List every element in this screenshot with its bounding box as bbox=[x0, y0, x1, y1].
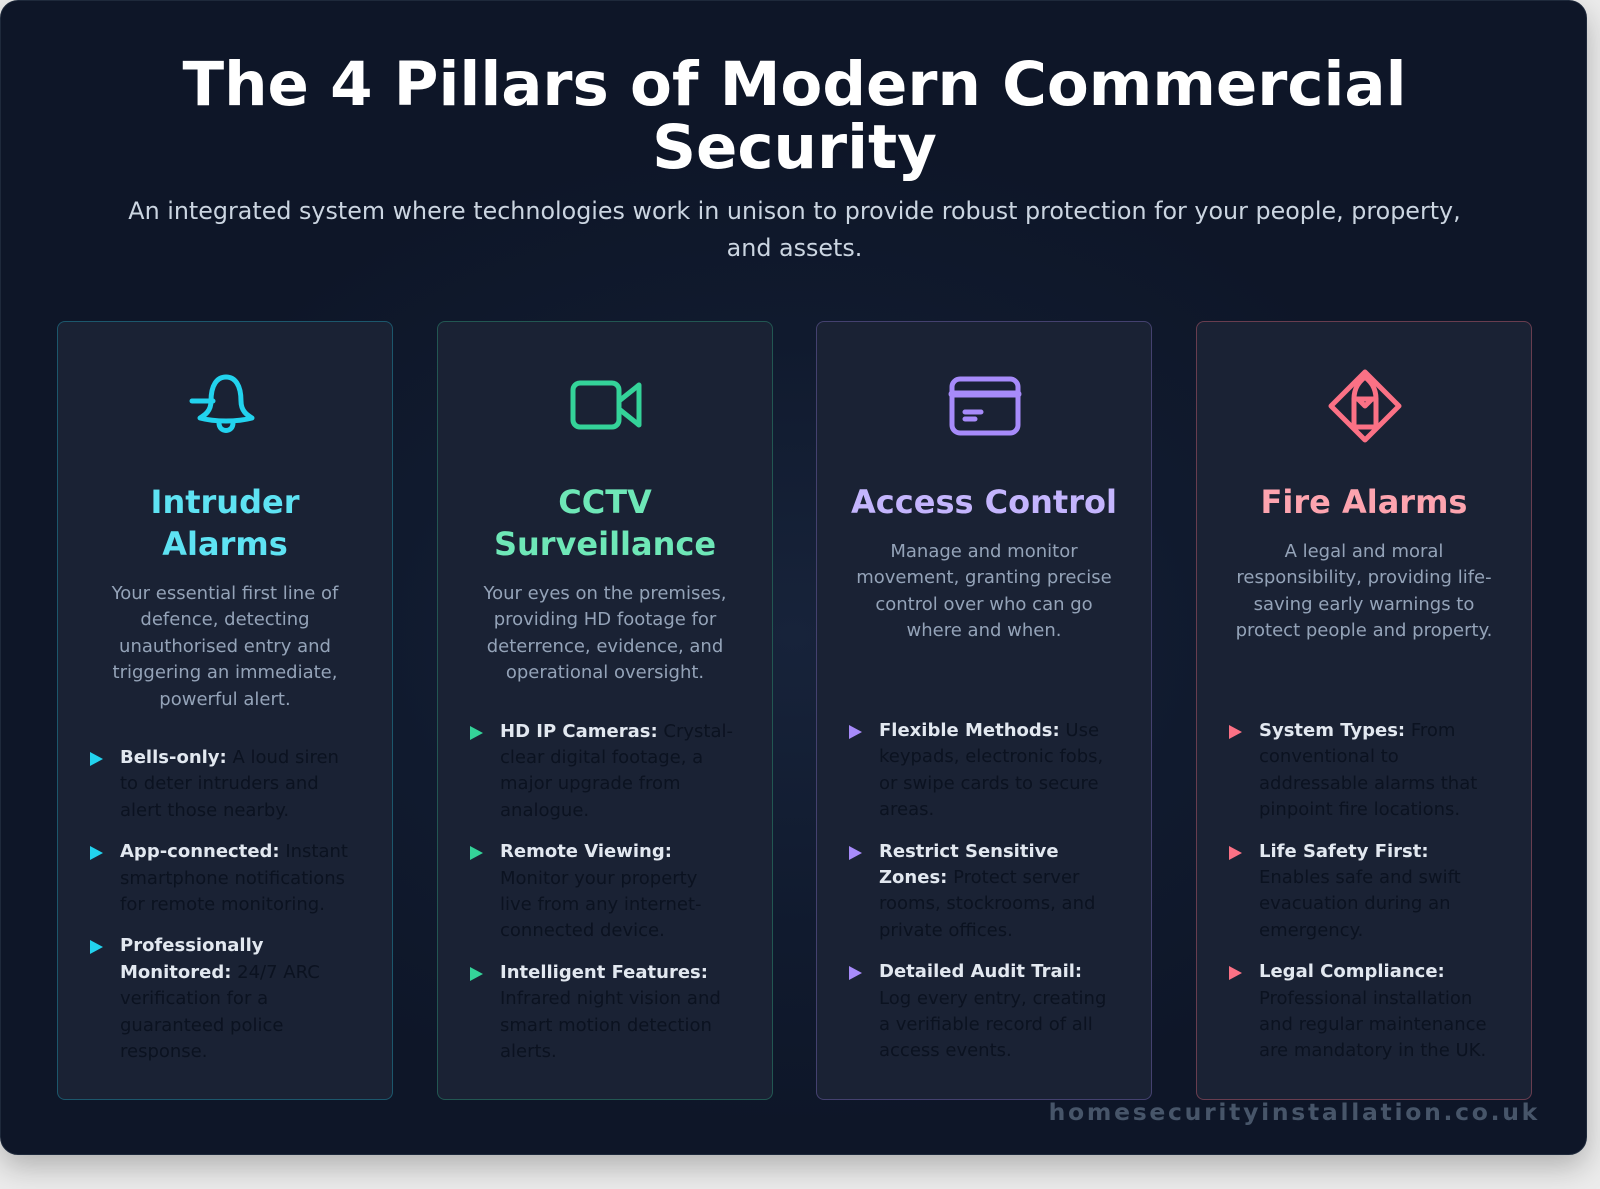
bullet list bbox=[1229, 720, 1487, 1061]
bullet list: Detailed Audit Trail: Log every entry, creating a verifiable record of all access events. bbox=[879, 961, 1106, 1061]
heading bbox=[151, 483, 300, 563]
title: Security bbox=[652, 112, 937, 183]
bullet list: Bells-only: A loud siren to deter intruders and alert those nearby. bbox=[120, 747, 339, 821]
title: The 4 Pillars of Modern Commercial bbox=[182, 49, 1407, 120]
bullet list: Life Safety First: Enables safe and swift evacuation during an emergency. bbox=[1259, 841, 1461, 941]
heading: Alarms bbox=[162, 525, 288, 563]
icon: video camera bbox=[570, 380, 642, 430]
bullet list: Flexible Methods: Use keypads, electronic fobs, or swipe cards to secure areas. bbox=[879, 720, 1103, 820]
panel: access control bbox=[816, 321, 1152, 1100]
bullet list: Restrict Sensitive Zones: Protect server rooms, stockrooms, and private offices. bbox=[879, 841, 1095, 941]
heading: CCTV bbox=[558, 483, 652, 521]
subtitle: An integrated system where technologies work in unison to provide robust protection for your people, property, bbox=[128, 197, 1461, 225]
panel: intruder alarms bbox=[57, 321, 393, 1100]
bullet list: Legal Compliance: Professional installation and regular maintenance are mandatory in the UK. bbox=[1259, 961, 1487, 1061]
bullet list bbox=[90, 747, 348, 1062]
subtitle bbox=[128, 197, 1461, 262]
description: Manage and monitor movement, granting precise control over who can go where and when. bbox=[856, 541, 1112, 641]
description: Your essential first line of defence, detecting unauthorised entry and triggering an immediate, powerful alert. bbox=[112, 583, 338, 710]
bullet list: live from any internet-connected device. bbox=[500, 894, 702, 941]
title bbox=[182, 49, 1407, 183]
icon: bell bbox=[190, 374, 254, 433]
footer url: homesecurityinstallation.co.uk bbox=[1049, 1098, 1540, 1126]
bullet list: App-connected: Instant smartphone notifications for remote monitoring. bbox=[120, 841, 348, 915]
heading: Intruder bbox=[151, 483, 299, 521]
icon: fire alarm diamond bbox=[1328, 370, 1402, 442]
bullet list: Remote Viewing: Monitor your property bbox=[500, 841, 697, 889]
bullet list: Intelligent Features: Infrared night vision and smart motion detection alerts. bbox=[500, 962, 721, 1062]
heading: Fire Alarms bbox=[1261, 483, 1467, 521]
panel: cctv bbox=[437, 321, 773, 1100]
heading: Surveillance bbox=[494, 525, 716, 563]
panel: fire alarms bbox=[1196, 321, 1532, 1100]
heading: Access Control bbox=[851, 483, 1117, 521]
description: Your eyes on the premises, providing HD footage for deterrence, evidence, and operational oversight. bbox=[483, 583, 727, 683]
subtitle: and assets. bbox=[727, 234, 862, 262]
bullet list bbox=[470, 721, 733, 1062]
bullet list: HD IP Cameras: Crystal-clear digital footage, a major upgrade from analogue. bbox=[500, 721, 733, 821]
description: A legal and moral responsibility, providing life-saving early warnings to protect people and property. bbox=[1236, 541, 1492, 641]
bullet list bbox=[849, 720, 1106, 1061]
bullet list: System Types: From conventional to addressable alarms that pinpoint fire locations. bbox=[1259, 720, 1477, 820]
bullet list: Professionally Monitored: 24/7 ARC verification for a guaranteed police response. bbox=[120, 935, 320, 1062]
icon: access card bbox=[948, 376, 1022, 436]
heading bbox=[494, 483, 716, 563]
